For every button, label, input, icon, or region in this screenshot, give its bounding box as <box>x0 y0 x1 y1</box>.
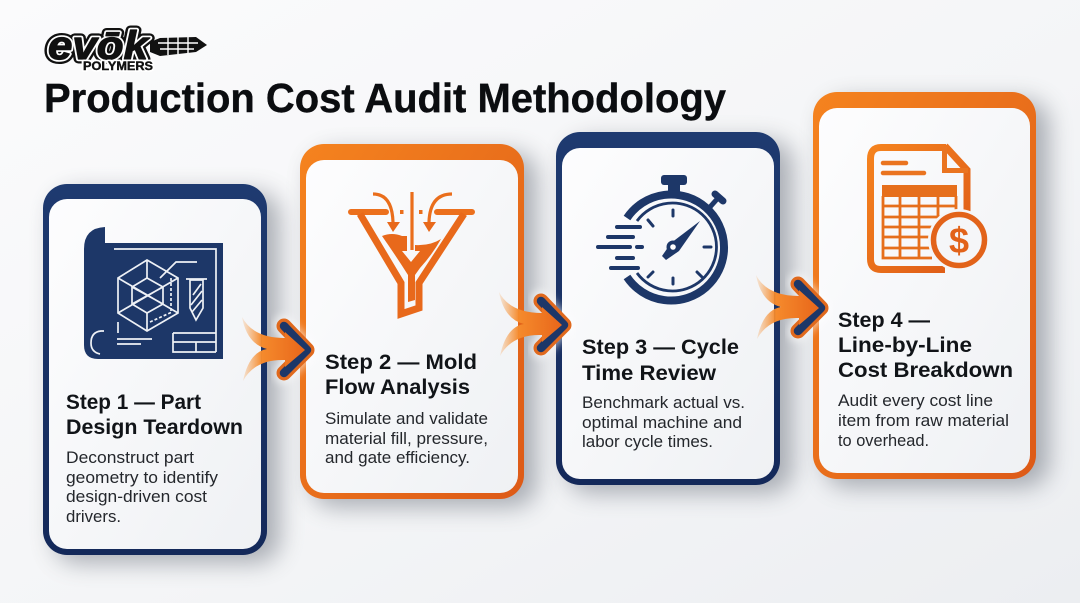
icon: spreadsheet with dollar: $ <box>949 220 969 261</box>
description: Simulate and validate <box>325 409 488 428</box>
logo: evok polymers: POLYMERS <box>83 61 153 73</box>
logo: evok polymers: POLYMERS <box>83 61 153 73</box>
description: and gate efficiency. <box>325 448 470 467</box>
heading: Line-by-Line <box>838 333 972 357</box>
description: Benchmark actual vs. <box>582 393 745 412</box>
arrow: step 3 to 4 <box>756 275 821 339</box>
description: Deconstruct part <box>66 448 194 467</box>
description: Audit every cost line <box>838 391 993 410</box>
title: Production Cost Audit Methodology <box>44 75 726 121</box>
logo: evok polymers: evōk <box>48 24 150 68</box>
logo: evok polymers: evōk <box>48 24 150 68</box>
icon: blueprint <box>84 227 223 359</box>
heading: Cost Breakdown <box>838 358 1013 382</box>
heading: Step 3 — Cycle <box>582 335 739 359</box>
heading: Step 1 — Part <box>66 390 201 414</box>
icon: stopwatch <box>598 175 724 300</box>
description: drivers. <box>66 507 121 526</box>
description: geometry to identify <box>66 468 219 487</box>
logo: evok polymers <box>48 24 207 73</box>
heading: Step 2 — Mold <box>325 350 477 374</box>
heading: Design Teardown <box>66 415 243 439</box>
panel: step 1 <box>43 184 280 563</box>
description: design-driven cost <box>66 487 207 506</box>
heading: Time Review <box>582 361 716 385</box>
heading: Step 4 — <box>838 308 930 332</box>
heading: Flow Analysis <box>325 375 470 399</box>
panel: step 2 <box>300 144 537 507</box>
panel: step 4 <box>813 92 1049 487</box>
arrow: step 2 to 3 <box>499 292 564 356</box>
description: item from raw material <box>838 411 1009 430</box>
description: optimal machine and <box>582 413 742 432</box>
description: labor cycle times. <box>582 432 713 451</box>
panel: step 3 <box>556 132 793 493</box>
icon: funnel <box>351 192 472 314</box>
arrow: step 1 to 2 <box>242 317 307 381</box>
description: to overhead. <box>838 431 929 450</box>
icon: spreadsheet with dollar <box>870 146 990 271</box>
logo: evok polymers: evōk <box>48 24 150 68</box>
description: material fill, pressure, <box>325 429 488 448</box>
